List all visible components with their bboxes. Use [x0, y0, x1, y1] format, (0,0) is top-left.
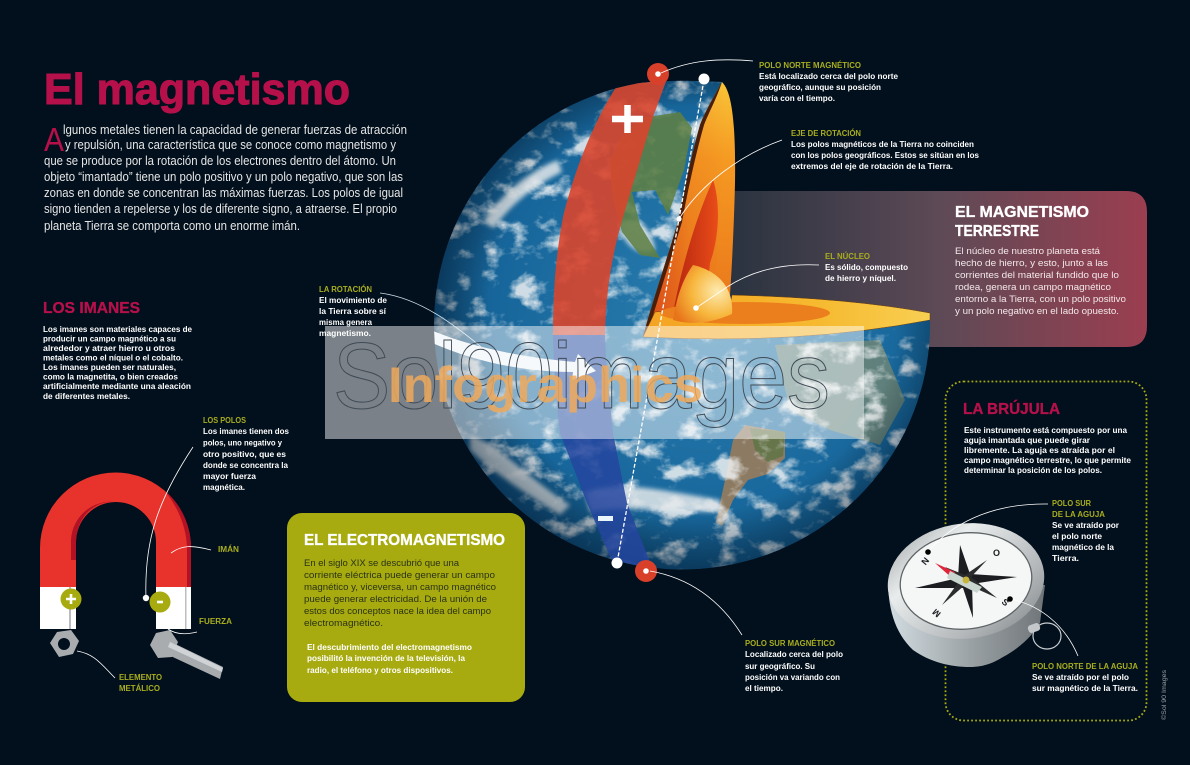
compass ring	[1033, 623, 1061, 649]
panel: el magnetismo terrestre: corrientes del material fundido que lo	[955, 269, 1119, 280]
north america land	[610, 112, 692, 258]
panel: los imanes: como la magnetita, o bien creados	[43, 372, 178, 382]
callout: polo norte magnético: geográfico, aunque su posición	[759, 82, 881, 92]
callout: la rotación: El movimiento de	[319, 295, 387, 305]
rotation arrow	[430, 331, 596, 380]
callout: polo norte de la aguja: sur magnético de la Tierra.	[1032, 683, 1138, 693]
callout: eje de rotación: Los polos magnéticos de la Tierra no coinciden	[791, 139, 974, 149]
panel: el electromagnetismo: magnético y, viceversa, un campo magnético	[304, 581, 496, 592]
panel: la brújula: Este instrumento está compuesto por una	[964, 425, 1127, 435]
callout: polo norte magnético	[759, 60, 898, 103]
compass cardinal letters: O	[993, 548, 1000, 558]
panel: el electromagnetismo: El descubrimiento del electromagnetismo	[307, 642, 472, 652]
callout: los polos: LOS POLOS	[203, 415, 246, 425]
callout: la rotación: la Tierra sobre sí	[319, 306, 387, 316]
callout: polo sur magnético: Localizado cerca del polo	[745, 649, 843, 659]
compass cardinal letters: N	[919, 556, 931, 567]
intro text block	[44, 121, 407, 233]
callout: polo sur magnético	[745, 638, 843, 693]
panel: los imanes: de diferentes metales.	[43, 391, 130, 401]
callout: eje de rotación: con los polos geográficos. Estos se sitúan en los	[791, 150, 979, 160]
compass cardinal letters: M	[931, 607, 943, 619]
callout: polo norte de la aguja: POLO NORTE DE LA AGUJA	[1032, 661, 1138, 671]
callout: polo sur de la aguja: DE LA AGUJA	[1052, 509, 1105, 519]
compass rose	[915, 545, 1017, 618]
callout: eje de rotación	[676, 127, 979, 222]
icon: compass	[881, 514, 1061, 667]
cut wall	[643, 82, 735, 337]
icon: positive pole	[60, 588, 82, 610]
label: elemento metálico: ELEMENTO	[119, 672, 162, 682]
panel: el electromagnetismo	[287, 513, 525, 702]
compass crown	[1027, 622, 1041, 634]
callout: polo norte de la aguja	[1007, 596, 1138, 693]
intro text block: que se produce por la rotación de los electrones dentro del átomo. Un	[44, 153, 396, 168]
blue magnetic band	[553, 335, 655, 575]
label: elemento metálico: METÁLICO	[119, 683, 160, 693]
intro text block: objeto “imantado” tiene un polo positivo y un polo negativo, que son las	[44, 169, 403, 184]
callout lines: magnet	[77, 447, 211, 678]
intro text block: lgunos metales tienen la capacidad de generar fuerzas de atracción	[63, 122, 407, 137]
icon: negative pole	[150, 592, 170, 612]
callout: polo sur magnético: el tiempo.	[745, 683, 783, 693]
panel: los imanes: metales como el níquel o el cobalto.	[43, 352, 183, 362]
callout: polo sur de la aguja: magnético de la	[1052, 542, 1114, 552]
compass cardinal letters	[919, 548, 1011, 619]
callout: polo sur de la aguja: POLO SUR	[1052, 498, 1092, 508]
callout: el núcleo: Es sólido, compuesto	[825, 262, 908, 272]
callout: polo sur de la aguja: el polo norte	[1052, 531, 1102, 541]
disc: horizontal cut	[643, 295, 930, 339]
panel: los imanes: producir un campo magnético a su	[43, 334, 176, 344]
cut outer mantle	[672, 180, 718, 322]
panel: la brújula: LA BRÚJULA	[963, 399, 1060, 418]
intro text block: planeta Tierra se comporta como un enorme imán.	[44, 218, 300, 233]
compass case bottom	[888, 585, 1045, 667]
panel: los imanes: artificialmente mediante una aleación	[43, 381, 191, 391]
panel: los imanes: Los imanes son materiales capaces de	[43, 324, 192, 334]
compass needle	[935, 563, 982, 593]
panel: el magnetismo terrestre: El núcleo de nuestro planeta está	[955, 245, 1101, 256]
title: El magnetismo	[44, 65, 350, 114]
callout: polo sur magnético: posición va variando con	[745, 672, 840, 682]
icon: horseshoe magnet	[40, 473, 191, 629]
panel: el magnetismo terrestre: hecho de hierro, y esto, junto a las	[955, 257, 1108, 268]
panel: el magnetismo terrestre: EL MAGNETISMO	[955, 204, 1089, 221]
callout: el núcleo: de hierro y níquel.	[825, 273, 896, 283]
panel: el magnetismo terrestre: rodea, genera un campo magnético	[955, 281, 1111, 292]
intro text block: y repulsión, una característica que se conoce como magnetismo y	[65, 137, 396, 152]
callout: los polos: Los imanes tienen dos	[203, 426, 289, 436]
earth surface	[430, 75, 935, 575]
callout: los polos: mayor fuerza	[203, 471, 256, 481]
callout: polo sur magnético: POLO SUR MAGNÉTICO	[745, 638, 835, 648]
callout: los polos: otro positivo, que es	[203, 449, 286, 459]
callout: eje de rotación: extremos del eje de rotación de la Tierra.	[791, 161, 953, 171]
compass cardinal letters: S	[1000, 597, 1011, 608]
panel: los imanes: Los imanes pueden ser naturales,	[43, 362, 176, 372]
panel: el magnetismo terrestre: TERRESTRE	[955, 223, 1039, 240]
panel: el electromagnetismo: electromagnético.	[304, 617, 383, 628]
callout: los polos: donde se concentra la	[203, 460, 288, 470]
callout: polo norte magnético: varía con el tiempo.	[759, 93, 835, 103]
panel: el magnetismo terrestre	[730, 191, 1147, 347]
icon: metal nut	[50, 630, 79, 657]
panel: la brújula: aguja imantada que puede girar	[964, 435, 1091, 445]
intro text block: A	[44, 121, 64, 158]
panel: el electromagnetismo: posibilitó la invención de la televisión, la	[307, 653, 465, 663]
panel: el electromagnetismo: estos dos conceptos nace la idea del campo	[304, 605, 491, 616]
panel: la brújula: determinar la posición de los polos.	[964, 465, 1102, 475]
chart: cutaway earth globe	[430, 75, 935, 575]
watermark: Infographics	[388, 357, 703, 413]
callout: la rotación: magnetismo.	[319, 328, 371, 338]
label: fuerza: FUERZA	[199, 616, 232, 626]
callout: polo norte magnético: POLO NORTE MAGNÉTICO	[759, 60, 861, 70]
callout: el núcleo: EL NÚCLEO	[825, 250, 870, 261]
panel: el electromagnetismo: En el siglo XIX se descubrió que una	[304, 557, 460, 568]
panel: el electromagnetismo: puede generar electricidad. De la unión de	[304, 593, 487, 604]
callout: polo norte magnético: Está localizado cerca del polo norte	[759, 71, 898, 81]
callout: el núcleo	[693, 250, 908, 311]
minus sign	[598, 516, 613, 521]
south america land	[716, 425, 785, 526]
panel: los imanes: LOS IMANES	[43, 300, 140, 317]
panel: el electromagnetismo: EL ELECTROMAGNETISMO	[304, 532, 505, 549]
plus sign	[612, 105, 643, 133]
callout: la rotación: misma genera	[319, 317, 372, 327]
panel: la brújula: libremente. La aguja es atraída por el	[964, 445, 1115, 455]
callout: polo norte de la aguja: Se ve atraído por el polo	[1032, 672, 1129, 682]
callout: polo sur de la aguja	[925, 498, 1120, 563]
watermark: Sol90images	[333, 323, 830, 428]
cloud streaks	[470, 160, 722, 515]
callout: los polos	[203, 415, 289, 492]
panel: el electromagnetismo: radio, el teléfono y otros dispositivos.	[307, 665, 453, 675]
panel: la brújula: campo magnético terrestre, lo que permite	[964, 455, 1131, 465]
callout: los polos: magnética.	[203, 482, 245, 492]
panel: el magnetismo terrestre: entorno a la Tierra, con un polo positivo	[955, 293, 1126, 304]
label: imán: IMÁN	[218, 544, 239, 554]
panel: el magnetismo terrestre: y un polo negativo en el lado opuesto.	[955, 305, 1119, 316]
intro text block: signo tienden a repelerse y los de diferente signo, a atraerse. El propio	[44, 201, 397, 216]
callout: la rotación: LA ROTACIÓN	[319, 283, 372, 294]
panel: los imanes	[43, 300, 192, 401]
africa land	[775, 340, 905, 445]
callout: polo sur de la aguja: Se ve atraído por	[1052, 520, 1120, 530]
callout: la rotación	[319, 283, 486, 351]
intro text block: zonas en donde se concentran las máximas fuerzas. Los polos de igual	[44, 185, 403, 200]
credit: ©Sol 90 Images	[1160, 669, 1168, 720]
icon: south magnetic pole	[612, 558, 742, 635]
icon: north magnetic pole	[647, 60, 753, 85]
panel: los imanes: alrededor y atraer hierro u otros	[43, 343, 175, 353]
icon: metal bolt	[150, 630, 223, 679]
panel: el electromagnetismo: corriente eléctrica puede generar un campo	[304, 569, 495, 580]
rotation axis	[617, 80, 704, 563]
compass bezel	[881, 514, 1051, 648]
callout: los polos: polos, uno negativo y	[203, 438, 282, 448]
inner core	[673, 265, 732, 323]
panel: la brújula	[946, 382, 1146, 720]
callout: polo sur de la aguja: Tierra.	[1052, 553, 1079, 563]
label: elemento metálico	[119, 672, 162, 693]
callout: polo sur magnético: sur geográfico. Su	[745, 661, 815, 671]
red magnetic band	[553, 76, 668, 335]
callout: eje de rotación: EJE DE ROTACIÓN	[791, 127, 861, 138]
